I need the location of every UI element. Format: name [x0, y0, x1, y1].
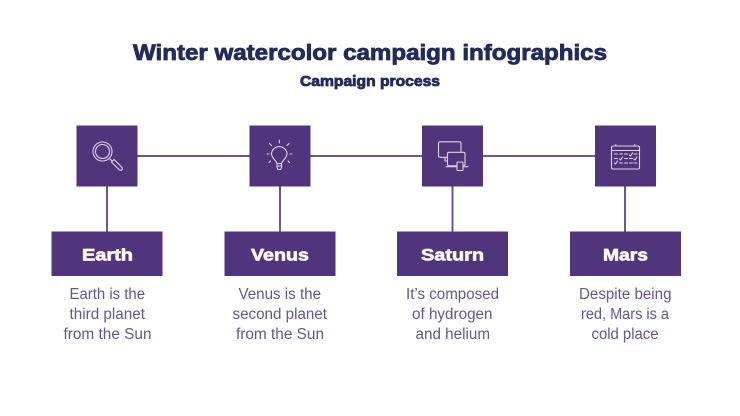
timeline connector	[107, 156, 625, 232]
subtitle: Campaign process	[300, 73, 440, 90]
description: Earth: third planet	[70, 306, 146, 323]
panel: Venus	[224, 126, 336, 343]
label: Mars	[570, 232, 681, 276]
description: Saturn: of hydrogen	[412, 306, 492, 323]
label: Venus	[224, 232, 336, 276]
description: Earth: from the Sun	[64, 326, 152, 343]
panel: Mars	[570, 126, 681, 343]
icon box: devices	[422, 126, 483, 186]
title: Winter watercolor campaign infographics	[133, 40, 607, 65]
label: Saturn	[397, 232, 508, 276]
label: Mars: Mars	[603, 246, 648, 264]
icon box: calendar	[595, 126, 656, 186]
description: Mars: red, Mars is a	[581, 306, 669, 323]
description: Saturn	[406, 286, 499, 343]
icon box: light bulb	[250, 126, 310, 186]
description: Venus: Venus is the	[238, 286, 321, 303]
panel: Saturn	[397, 126, 508, 343]
description: Earth	[64, 286, 152, 343]
description: Mars: Despite being	[579, 286, 672, 303]
description: Saturn: It’s composed	[406, 286, 499, 303]
label: Earth: Earth	[82, 246, 133, 264]
description: Venus	[232, 286, 328, 343]
label: Venus: Venus	[251, 246, 309, 264]
description: Mars: cold place	[592, 326, 658, 343]
description: Saturn: and helium	[416, 326, 490, 343]
description: Venus: from the Sun	[236, 326, 324, 343]
panel: Earth	[52, 126, 162, 343]
icon box: magnifying glass	[76, 126, 138, 186]
label: Earth	[52, 232, 162, 276]
label: Saturn: Saturn	[421, 246, 484, 264]
description: Earth: Earth is the	[70, 286, 145, 303]
description: Venus: second planet	[232, 306, 328, 323]
description: Mars	[579, 286, 672, 343]
